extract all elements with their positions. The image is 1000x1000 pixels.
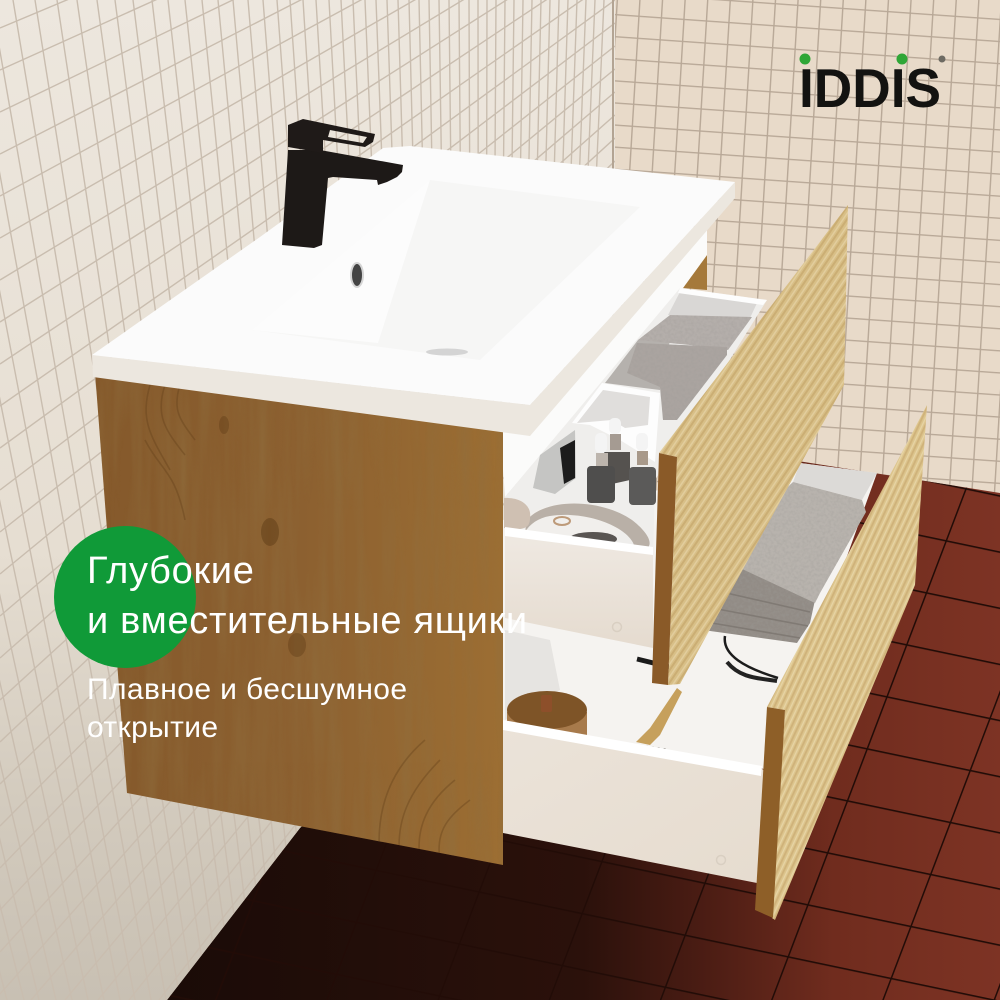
- upper drawer interior: [505, 288, 767, 560]
- cabinet white carcass under the basin: [500, 223, 707, 497]
- hair dryer in lower drawer: [637, 636, 778, 681]
- towels in upper drawer: [627, 315, 752, 420]
- basin bowl: [252, 180, 640, 360]
- basin overflow drain: [351, 263, 363, 287]
- heading: [87, 550, 528, 642]
- cosmetics jar with label: [533, 430, 576, 494]
- lower drawer white side panel: [503, 720, 770, 883]
- lower drawer interior: [503, 463, 877, 770]
- towels in lower drawer: [703, 482, 866, 643]
- upper drawer ribbed wood front: [652, 205, 848, 685]
- wooden box in lower drawer: [507, 691, 587, 738]
- countertop upper surface: [92, 146, 735, 405]
- cosmetic bottles: [587, 418, 656, 505]
- background: left tiled wall: [0, 0, 620, 1000]
- organizer box in upper drawer: [572, 383, 660, 462]
- lower drawer ribbed wood front: [755, 405, 927, 920]
- background: right tiled wall: [600, 0, 1000, 520]
- subheading: открытие: [87, 711, 219, 744]
- subheading: [87, 673, 407, 744]
- subheading: Плавное и бесшумное: [87, 673, 407, 706]
- heading: и вместительные ящики: [87, 600, 528, 642]
- faucet: [282, 119, 403, 248]
- jewelry tray and bowl: [504, 498, 650, 551]
- green accent circle: [54, 526, 196, 668]
- cabinet wood side panel: [90, 370, 510, 870]
- logo: IDDIS: IDDIS: [799, 57, 941, 119]
- heading: Глубокие: [87, 550, 255, 592]
- countertop front edge: [92, 182, 735, 436]
- background: terracotta floor: [167, 455, 1000, 1000]
- upper drawer white side panel: [505, 527, 653, 648]
- cabinet rear wood piece: [683, 255, 707, 290]
- hair brush in lower drawer: [610, 688, 682, 750]
